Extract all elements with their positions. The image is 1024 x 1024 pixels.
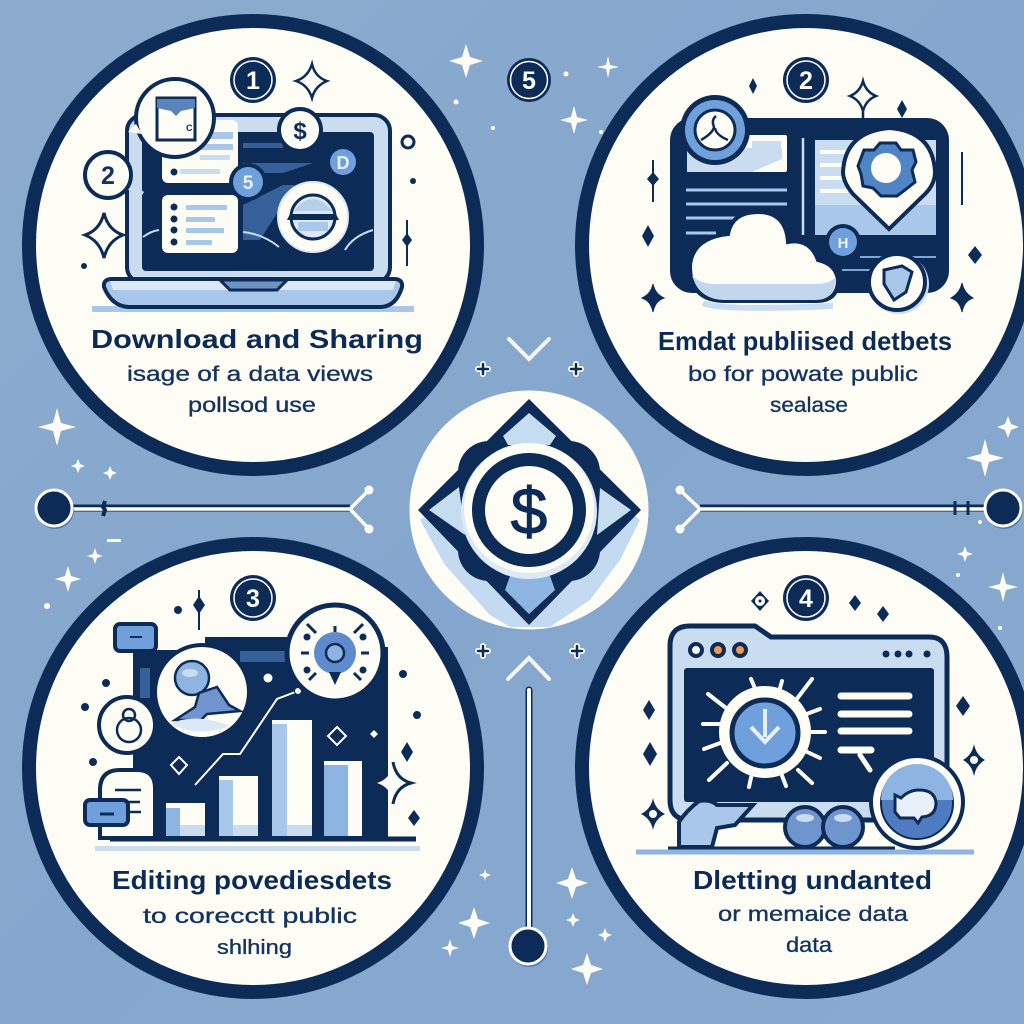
heading: Editing povediesdets — [112, 865, 392, 895]
panel 3: editing — [29, 544, 477, 992]
description: or memaice data — [718, 903, 908, 926]
description: shlhing — [217, 937, 292, 959]
chat bubble upper — [115, 624, 156, 651]
badge: number 2: 2 — [799, 67, 813, 95]
description — [688, 363, 918, 417]
badge: number 4 — [783, 575, 829, 621]
heading: Dletting undanted — [693, 865, 932, 895]
description — [127, 363, 373, 417]
bars — [166, 720, 362, 836]
bubble: D: D — [336, 153, 350, 173]
heading: Emdat publiised detbets — [658, 326, 952, 356]
badge: number 3: 3 — [246, 585, 260, 613]
decorations — [641, 591, 985, 830]
bubble: D — [326, 145, 360, 179]
sparkle icons — [642, 78, 982, 312]
hand shape — [679, 800, 753, 847]
bubble: dollar: $ — [293, 118, 307, 145]
bubble: gear virus — [287, 605, 383, 701]
bubble: number 2: 2 — [101, 162, 115, 190]
bubble: tag — [869, 254, 929, 314]
bubble: dollar — [279, 109, 321, 151]
text lines — [841, 696, 909, 770]
sparkle icons — [81, 64, 416, 269]
browser window — [636, 626, 974, 852]
window buttons — [690, 644, 746, 656]
panel 2: published datasets — [582, 21, 1024, 469]
connector: left — [36, 486, 374, 534]
trend line — [195, 691, 298, 785]
laptop icon — [85, 79, 414, 312]
bubble: user — [680, 95, 750, 165]
badge: number 1: 1 — [246, 67, 260, 95]
bubble: H — [825, 224, 861, 260]
bubble: person — [99, 697, 155, 753]
description: isage of a data views — [127, 363, 373, 386]
bubble: wallet: C — [186, 123, 193, 133]
decorations — [81, 590, 421, 826]
connector: right — [676, 486, 1023, 534]
map pin gear — [843, 128, 935, 229]
desk line — [636, 850, 974, 854]
panel 4: deleting — [582, 544, 1024, 992]
description — [718, 903, 908, 957]
badge: number 3 — [230, 575, 276, 621]
lower list card — [162, 195, 238, 253]
connector: bottom — [508, 658, 549, 967]
panel 1: download and sharing — [29, 21, 477, 469]
small plus marks — [478, 364, 582, 656]
badge: number 4: 4 — [799, 585, 813, 613]
description: data — [786, 934, 832, 957]
badge: number 1 — [230, 57, 276, 103]
bubble: 5: 5 — [243, 173, 254, 194]
connector: top — [509, 339, 549, 359]
document — [100, 770, 155, 838]
central dollar emblem — [410, 390, 648, 630]
upper card — [162, 120, 238, 183]
central dollar emblem: $ — [511, 474, 547, 548]
heading: Download and Sharing — [91, 324, 423, 354]
bubble: 5 — [229, 163, 267, 201]
cloud — [690, 212, 838, 308]
bubble: magnifier figure — [155, 645, 249, 739]
spheres — [785, 807, 863, 847]
chat lens — [871, 756, 963, 848]
badge: number 5 — [507, 58, 551, 102]
description: to corecctt public — [143, 905, 357, 928]
bubble: H: H — [838, 235, 848, 252]
description: pollsod use — [188, 394, 316, 417]
bar chart dashboard — [85, 605, 420, 851]
badge: number 5: 5 — [522, 67, 536, 95]
description: sealase — [770, 394, 848, 417]
badge: number 2 — [783, 57, 829, 103]
chat bubble lower — [85, 800, 128, 825]
description: bo for powate public — [688, 363, 918, 386]
description — [143, 905, 357, 959]
bubble: number 2 — [85, 152, 144, 198]
laptop base — [104, 279, 402, 307]
download button with rays — [703, 679, 825, 787]
browser window icon — [670, 95, 949, 314]
bubble: wallet — [128, 79, 214, 157]
bubble: globe — [278, 182, 348, 252]
